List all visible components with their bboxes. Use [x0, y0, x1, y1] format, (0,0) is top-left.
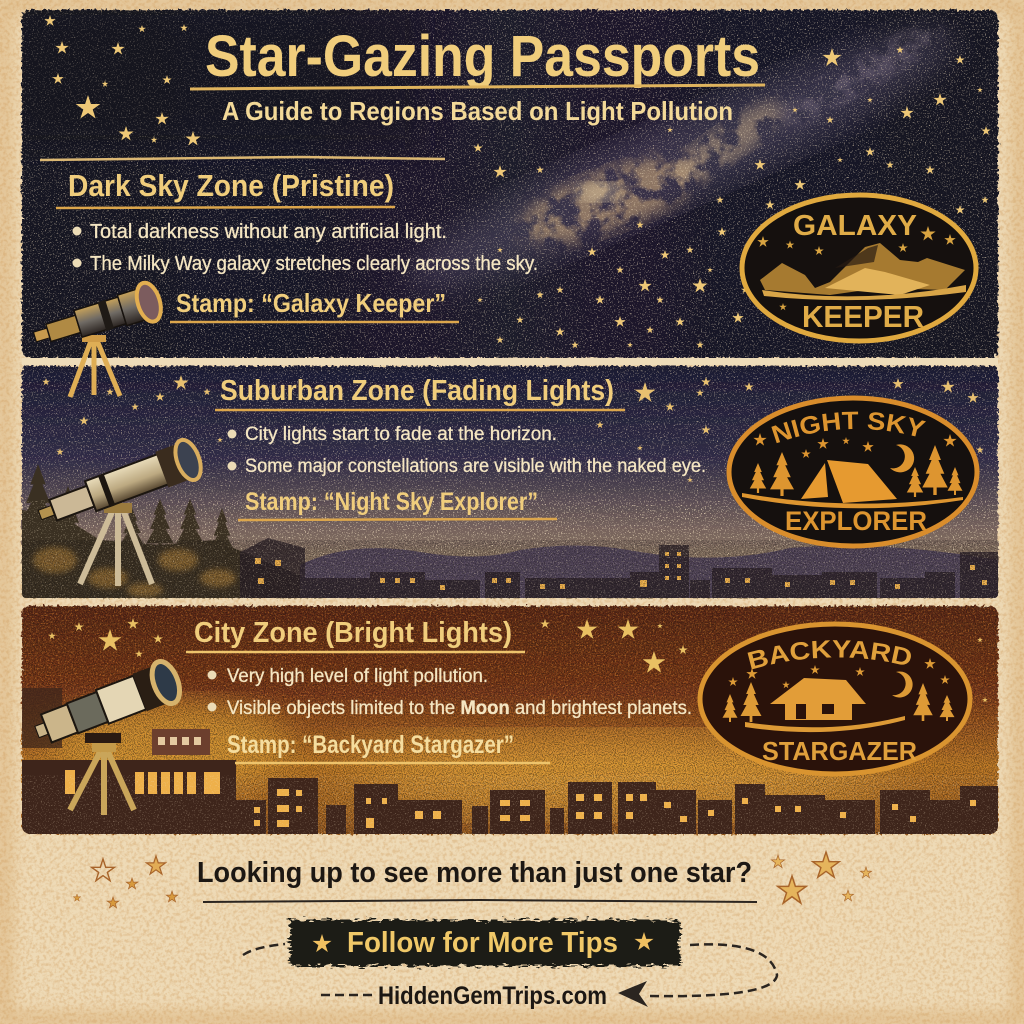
heading underline: [186, 651, 525, 653]
suburban heading: Suburban Zone (Fading Lights): [220, 375, 614, 407]
arrow head: [618, 981, 648, 1007]
milky way nebula: [0, 0, 998, 358]
title underline: [190, 85, 765, 89]
bullet list: suburban: [228, 424, 706, 477]
icon: telescope 1: [29, 280, 165, 397]
dark sky heading: Dark Sky Zone (Pristine): [68, 168, 394, 203]
icon: telescope 3: [29, 658, 185, 815]
badge: backyard stargazer: BACKYARD: [748, 640, 911, 670]
badge text: [750, 657, 915, 670]
stamp label: backyard stargazer: Stamp: “Backyard Stargazer”: [227, 731, 514, 759]
panel: city zone: [22, 606, 998, 834]
ground: [745, 716, 905, 732]
badge: night sky explorer: NIGHT SKY: [771, 412, 926, 444]
website: HiddenGemTrips.com: [378, 982, 607, 1010]
heading underline: [56, 207, 395, 208]
badge: backyard stargazer: STARGAZER: [762, 736, 917, 766]
bullet list: suburban: City lights start to fade at the horizon.: [245, 424, 557, 445]
badge: galaxy keeper: [742, 195, 976, 341]
heading underline: [215, 409, 625, 411]
subtitle: A Guide to Regions Based on Light Pollution: [222, 96, 733, 126]
footer rule: [203, 900, 757, 902]
divider line: [40, 157, 445, 160]
icon: telescope 2: [33, 436, 206, 586]
stamp underline: [238, 519, 557, 520]
bullet list: dark sky: Total darkness without any artificial light.: [90, 221, 447, 243]
bullet list: dark sky: The Milky Way galaxy stretches clearly across the sky.: [90, 253, 538, 275]
bullet list: dark sky: [72, 221, 538, 275]
badge text: GALAXY: [793, 210, 917, 242]
mountains: [760, 243, 965, 295]
panel: suburban zone: [22, 366, 998, 598]
skyline and rooftop: [22, 688, 998, 834]
banner text: Follow for More Tips: [347, 927, 618, 959]
badge: galaxy keeper: KEEPER: [802, 299, 924, 334]
bullet list: city: Very high level of light pollution.: [227, 666, 488, 687]
city heading: City Zone (Bright Lights): [194, 617, 512, 649]
ground: [742, 493, 963, 508]
badge text: [775, 429, 928, 444]
badge: backyard stargazer: [698, 622, 972, 776]
stamp underline: [235, 762, 550, 764]
badge: night sky explorer: [726, 396, 980, 548]
stamp label: night sky explorer: Stamp: “Night Sky Explorer”: [245, 488, 538, 516]
hills: [300, 545, 998, 598]
bullet list: suburban: Some major constellations are visible with the naked eye.: [245, 456, 706, 477]
trees: [722, 682, 954, 722]
stars and moon: [728, 658, 950, 697]
stars: footer left: [73, 856, 178, 908]
stars: city: [48, 618, 988, 702]
badge: night sky explorer: EXPLORER: [785, 506, 927, 536]
stars: dark sky: [44, 15, 991, 348]
divider highlight: [22, 358, 998, 365]
call to action banner: [290, 920, 680, 966]
panel: dark sky zone: [0, 0, 998, 358]
trees: [750, 445, 962, 497]
bullet list: city: [208, 666, 692, 719]
bullet list: city: Visible objects limited to the Moon and brightest planets.: [227, 698, 692, 719]
tent: [827, 460, 897, 503]
stars: footer right: [771, 852, 872, 903]
stars: suburban: [42, 375, 984, 482]
house: [770, 678, 866, 720]
footer question: Looking up to see more than just one star?: [197, 857, 752, 889]
skyline: [240, 538, 998, 598]
title: Star-Gazing Passports: [205, 24, 760, 89]
dashed arrow: [243, 944, 777, 996]
stamp underline: [170, 321, 459, 323]
trees: [22, 510, 300, 598]
stars in badge: [757, 226, 956, 310]
banner stars: [312, 932, 654, 952]
stars and moon: [753, 433, 957, 472]
stamp label: galaxy keeper: Stamp: “Galaxy Keeper”: [176, 288, 446, 318]
